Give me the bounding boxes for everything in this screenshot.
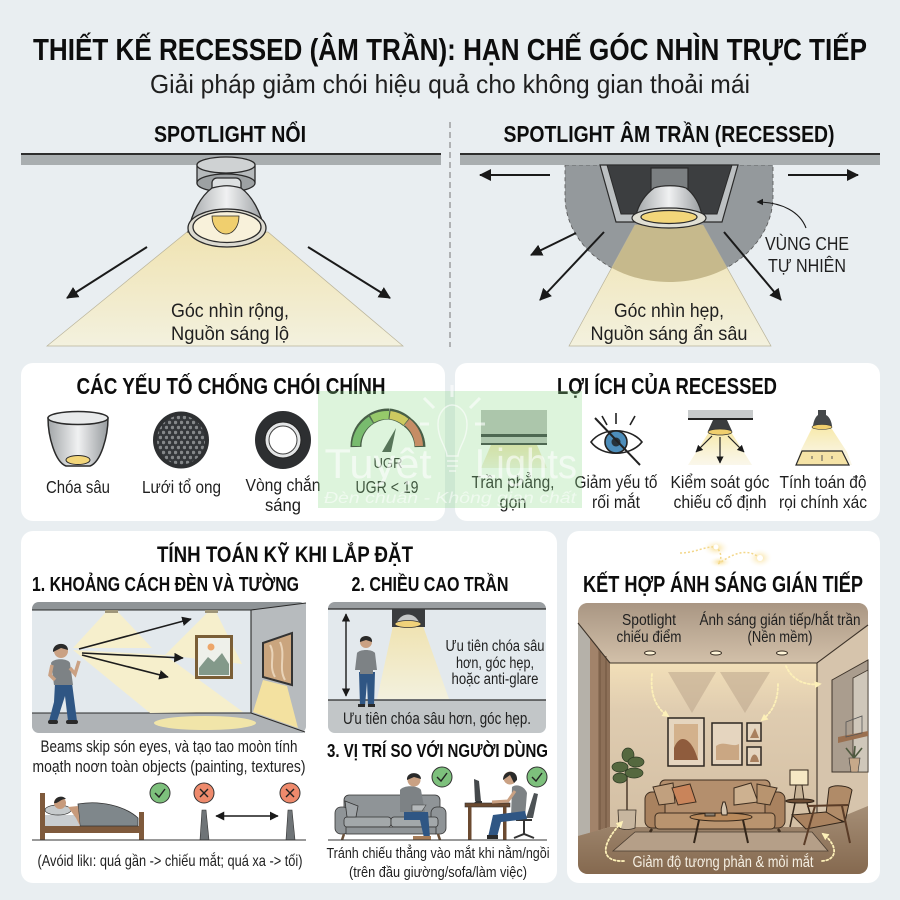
side lamp bbox=[786, 770, 814, 827]
icon: UGR gauge: UGR bbox=[374, 455, 403, 472]
label: eye strain: Giảm yếu tố bbox=[574, 472, 658, 492]
floor line bbox=[32, 839, 306, 841]
icon: honeycomb grid bbox=[153, 412, 209, 468]
caption 1: moạth noơn toàn objects (painting, textures) bbox=[32, 757, 306, 776]
heading: LỢI ÍCH CỦA RECESSED bbox=[557, 371, 777, 399]
arrow: lower left short bbox=[531, 233, 576, 255]
watermark: Lights bbox=[475, 440, 577, 487]
ceiling bar bbox=[21, 153, 441, 165]
note: ceiling height: hoặc anti-glare bbox=[452, 671, 538, 688]
label: eye strain: rối mắt bbox=[592, 491, 640, 512]
icon: check bbox=[150, 783, 170, 803]
icon: person on sofa bbox=[400, 773, 431, 840]
illustration: desk worker bbox=[465, 772, 538, 840]
artwork bbox=[668, 718, 761, 766]
icon: person standing bbox=[48, 644, 79, 724]
label: shield ring: sáng bbox=[265, 495, 301, 515]
caption 2: Ưu tiên chóa sâu hơn, góc hẹp. bbox=[343, 710, 531, 728]
subheading 1: 1. KHOẢNG CÁCH ĐÈN VÀ TƯỜNG bbox=[32, 572, 299, 596]
label: angle control: chiếu cố định bbox=[674, 492, 766, 512]
caption: avoid: (Avóid likı: quá gần -> chiếu mắt; quá xa -> tối) bbox=[38, 851, 302, 870]
light beam bbox=[47, 232, 403, 346]
icon: flat ceiling bbox=[481, 410, 547, 468]
icon: cross far bbox=[280, 783, 300, 803]
label: Góc nhìn rộng, bbox=[171, 300, 289, 322]
ceiling bar bbox=[460, 153, 880, 165]
light beam bbox=[569, 225, 771, 346]
panel: recessed spotlight bbox=[460, 120, 880, 346]
armchair bbox=[792, 786, 852, 845]
watermark bbox=[318, 385, 582, 508]
label: Nguồn sáng lộ bbox=[171, 323, 289, 345]
label: shield ring bbox=[246, 474, 320, 515]
scene: ceiling height bbox=[328, 602, 546, 733]
dotted arrows bbox=[606, 666, 834, 861]
label: spotlight bbox=[616, 612, 682, 646]
heading: TÍNH TOÁN KỸ KHI LẮP ĐẶT bbox=[157, 542, 413, 567]
icon: cross near bbox=[194, 783, 214, 803]
coffee table bbox=[690, 802, 752, 843]
icon: check sofa bbox=[432, 767, 452, 787]
watermark: Đèn chuẩn - Không gian chất bbox=[324, 489, 577, 507]
label: contrast: Giảm độ tương phản & mỏi mắt bbox=[632, 852, 814, 871]
heading: CÁC YẾU TỐ CHỐNG CHÓI CHÍNH bbox=[76, 372, 386, 399]
arrow: lower left long bbox=[540, 232, 604, 300]
caption 3: Tránh chiếu thẳng vào mắt khi nằm/ngồi bbox=[326, 844, 550, 862]
icon: lamp cone far bbox=[286, 810, 295, 840]
arrow: horizontal right bbox=[788, 174, 858, 176]
heading: recessed: SPOTLIGHT ÂM TRẦN (RECESSED) bbox=[504, 120, 834, 147]
card bbox=[21, 363, 445, 521]
icon: surface mounted lamp bbox=[188, 157, 266, 247]
caption 3 bbox=[326, 844, 550, 881]
shading zone bbox=[565, 165, 773, 282]
label bbox=[590, 300, 748, 345]
icon: fixed beam angle bbox=[688, 410, 753, 465]
label: Góc nhìn hẹp, bbox=[614, 300, 724, 322]
icon: person height bbox=[355, 636, 377, 707]
label: UGR: UGR < 19 bbox=[356, 477, 418, 497]
icon: deep reflector bbox=[48, 412, 108, 466]
subtitle: Giải pháp giảm chói hiệu quả cho không gian thoải mái bbox=[150, 69, 750, 99]
panel: recessed benefits bbox=[455, 363, 880, 521]
heading: spotlight noi: SPOTLIGHT NỔI bbox=[154, 120, 306, 147]
icon: recessed lamp bbox=[632, 168, 706, 228]
label: indirect light: Ánh sáng gián tiếp/hắt trần bbox=[700, 612, 860, 629]
icon: UGR gauge bbox=[356, 414, 420, 472]
callout arrow bbox=[757, 202, 806, 228]
icon: crossed eye bbox=[591, 413, 642, 465]
scene: living room bbox=[578, 603, 868, 874]
note: ceiling height: hơn, góc hẹp, bbox=[456, 655, 534, 672]
card bbox=[455, 363, 880, 521]
label: illuminance: rọi chính xác bbox=[779, 492, 867, 512]
panel: anti-glare factors bbox=[21, 363, 445, 521]
note: ceiling height bbox=[446, 638, 544, 688]
icon: lamp cone near bbox=[200, 810, 209, 840]
label: illuminance: Tính toán độ bbox=[780, 472, 866, 492]
note: ceiling height: Ưu tiên chóa sâu bbox=[446, 638, 544, 655]
label: illuminance bbox=[779, 472, 867, 512]
caption 3: (trên đầu giường/sofa/làm việc) bbox=[349, 864, 527, 881]
arrows: sight lines bbox=[79, 619, 191, 677]
downlights bbox=[644, 651, 788, 655]
label: indirect light: (Nền mềm) bbox=[748, 629, 812, 646]
callout: shading zone: TỰ NHIÊN bbox=[768, 255, 846, 276]
illustration: sofa bbox=[335, 795, 446, 840]
card bbox=[21, 531, 557, 883]
arrow: horizontal left bbox=[480, 174, 550, 176]
decorative glow bbox=[680, 539, 773, 568]
panel: indirect light bbox=[567, 531, 880, 883]
arrow: lower right long bbox=[724, 232, 781, 300]
icon: shield ring bbox=[255, 411, 311, 469]
label: Nguồn sáng ẩn sâu bbox=[590, 323, 748, 345]
label: flat ceiling: gọn bbox=[500, 492, 526, 512]
floor line bbox=[328, 839, 547, 841]
callout: shading zone: VÙNG CHE bbox=[765, 233, 849, 254]
subheading 3: 3. VỊ TRÍ SO VỚI NGƯỜI DÙNG bbox=[327, 740, 548, 761]
plant bbox=[612, 748, 644, 830]
arrow: distance bbox=[216, 815, 278, 817]
label: honeycomb: Lưới tổ ong bbox=[142, 477, 221, 497]
subheading 2: 2. CHIỀU CAO TRẦN bbox=[352, 573, 508, 596]
label: flat ceiling: Trần phẳng, bbox=[472, 471, 554, 492]
illustration: person in bed bbox=[40, 793, 144, 840]
label: angle control: Kiểm soát góc bbox=[670, 472, 770, 492]
label: indirect light bbox=[700, 612, 860, 646]
callout: shading zone bbox=[765, 233, 849, 276]
scene: lamp and wall distance bbox=[32, 602, 306, 733]
label: shield ring: Vòng chắn bbox=[246, 474, 320, 495]
label: spotlight: chiếu điểm bbox=[616, 629, 682, 646]
panel: installation calculations bbox=[21, 531, 557, 883]
label: angle control bbox=[670, 472, 770, 512]
card bbox=[567, 531, 880, 883]
label: eye strain bbox=[574, 472, 658, 512]
icon: illuminance calculation bbox=[796, 410, 852, 465]
arrow: left bbox=[67, 247, 147, 298]
sofa bbox=[645, 780, 785, 832]
arrow: right bbox=[308, 247, 390, 298]
label: spotlight: Spotlight bbox=[622, 612, 677, 629]
icon: check desk bbox=[527, 767, 547, 787]
panel: surface spotlight bbox=[21, 120, 441, 346]
caption 1: Beams skip són eyes, và tạo tao moòn tính bbox=[40, 737, 298, 756]
label: flat ceiling bbox=[472, 471, 554, 512]
recess housing bbox=[600, 165, 738, 222]
divider bbox=[449, 122, 451, 347]
watermark: Tuyệt bbox=[324, 440, 432, 487]
caption 1 bbox=[32, 737, 306, 776]
beam in shaded zone bbox=[612, 225, 727, 282]
label: deep reflector: Chóa sâu bbox=[46, 477, 110, 497]
label bbox=[171, 300, 289, 345]
